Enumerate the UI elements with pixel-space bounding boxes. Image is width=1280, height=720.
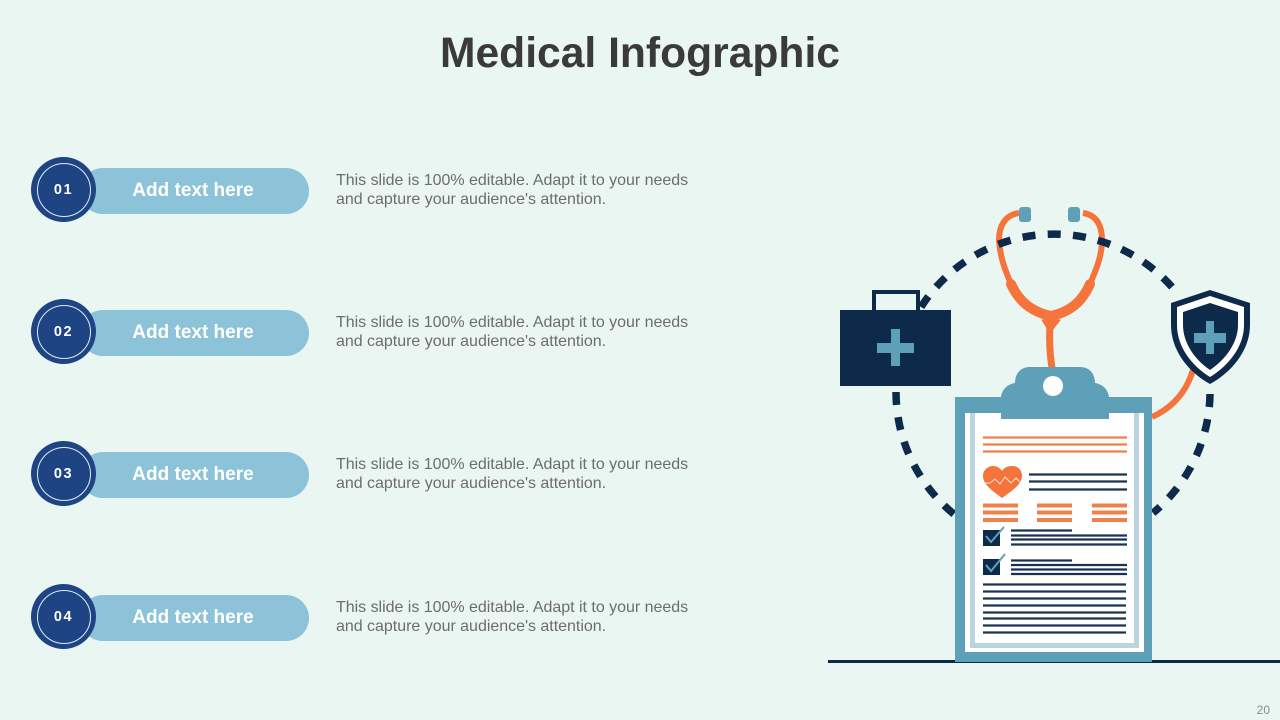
description 01 (336, 172, 688, 208)
number badge 04: 04 (54, 609, 73, 625)
description 02: and capture your audience's attention. (336, 333, 606, 350)
medical briefcase (840, 292, 951, 386)
checklist lines 2 (1011, 560, 1127, 574)
checkbox 1 (983, 527, 1004, 546)
checkbox 2 (983, 554, 1005, 575)
number badge 01: 01 (54, 182, 73, 198)
description 03 (336, 456, 688, 492)
floor line (828, 660, 1280, 663)
label pill 03: Add text here (132, 464, 254, 485)
clipboard clip (1001, 367, 1109, 419)
item 01 (31, 157, 688, 222)
label pill 01 (80, 168, 309, 214)
label pill 04 (80, 595, 309, 641)
orange header lines (983, 438, 1127, 452)
description 01: This slide is 100% editable. Adapt it to your needs (336, 172, 688, 189)
description 04: and capture your audience's attention. (336, 618, 606, 635)
shield (1171, 290, 1250, 384)
label pill 02 (80, 310, 309, 356)
label pill 01: Add text here (132, 180, 254, 201)
title: Medical Infographic (440, 29, 840, 77)
stethoscope (999, 213, 1193, 417)
orange table bars (983, 504, 1127, 522)
number badge 02 (31, 299, 96, 364)
description 01: and capture your audience's attention. (336, 191, 606, 208)
description 03: This slide is 100% editable. Adapt it to your needs (336, 456, 688, 473)
description 02 (336, 314, 688, 350)
item 03 (31, 441, 688, 506)
number badge 03: 03 (54, 466, 73, 482)
number badge 04 (31, 584, 96, 649)
page number: 20 (1257, 703, 1270, 717)
checklist lines 1 (1011, 530, 1127, 544)
body text lines (983, 584, 1126, 632)
label pill 04: Add text here (132, 607, 254, 628)
item 04 (31, 584, 688, 649)
clipboard (955, 367, 1152, 662)
description 04 (336, 599, 688, 635)
item 02 (31, 299, 688, 364)
number badge 01 (31, 157, 96, 222)
label pill 03 (80, 452, 309, 498)
description 02: This slide is 100% editable. Adapt it to your needs (336, 314, 688, 331)
label pill 02: Add text here (132, 322, 254, 343)
number badge 03 (31, 441, 96, 506)
ear tips (1019, 207, 1080, 222)
icon: heart (983, 466, 1022, 498)
description 03: and capture your audience's attention. (336, 475, 606, 492)
description 04: This slide is 100% editable. Adapt it to your needs (336, 599, 688, 616)
heart side lines (1029, 474, 1127, 490)
number badge 02: 02 (54, 324, 73, 340)
dashed circle (896, 234, 1210, 515)
